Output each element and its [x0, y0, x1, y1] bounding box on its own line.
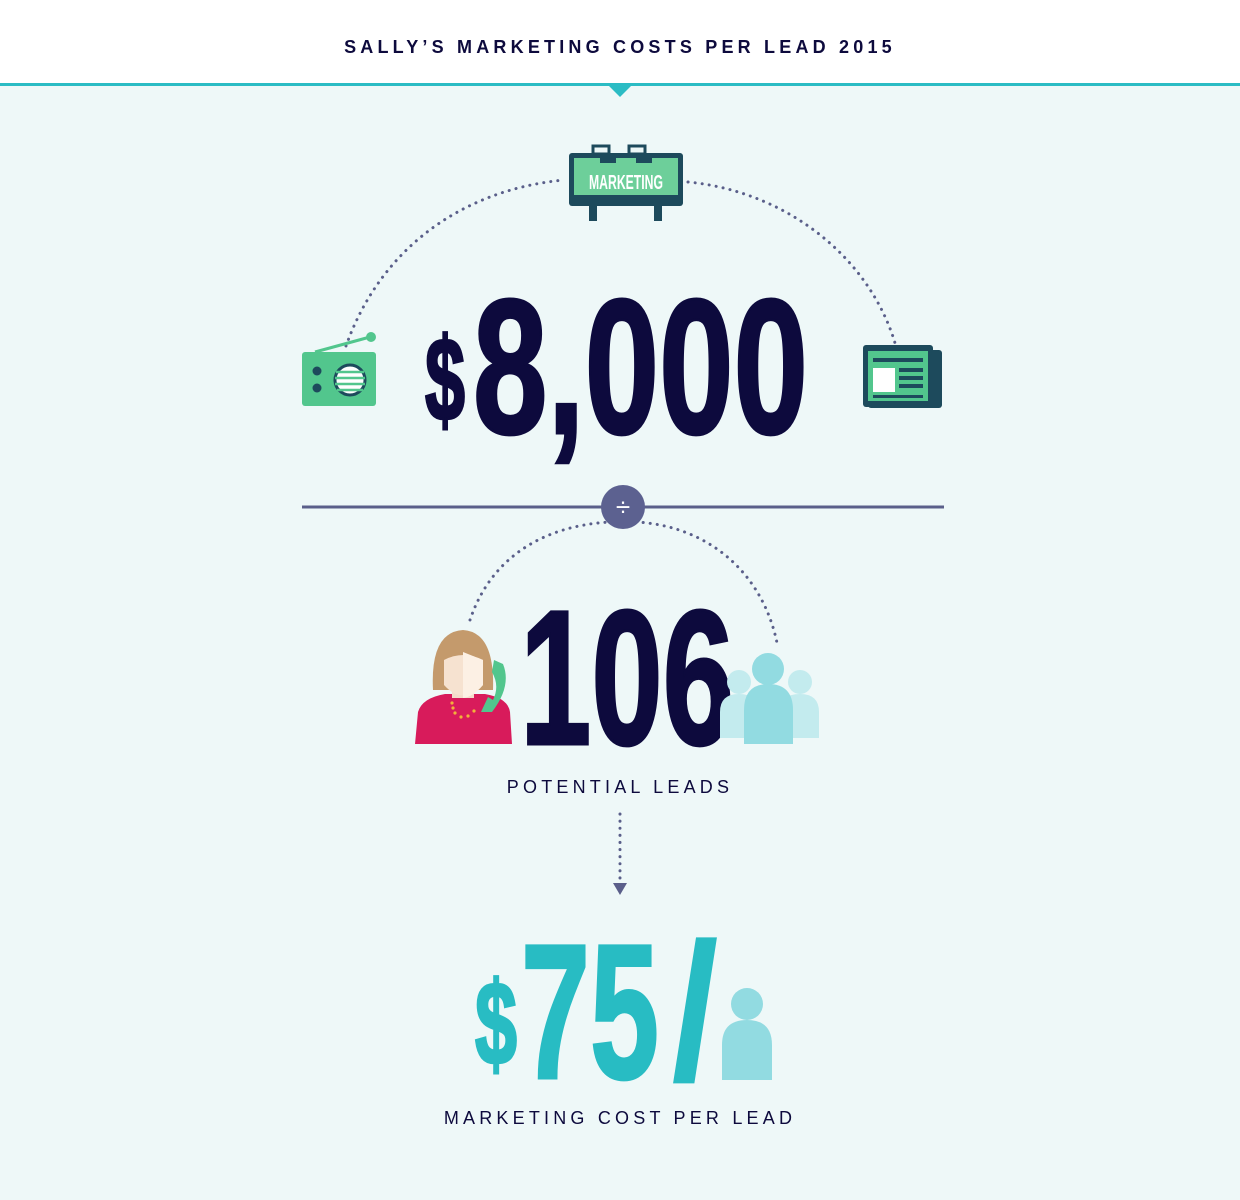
dotted arcs: [346, 180, 895, 878]
total cost number: $: [425, 314, 465, 446]
arrow head: [613, 883, 627, 895]
icon: billboard: [569, 146, 683, 221]
total cost number: 8,000: [473, 259, 808, 474]
icon: newspaper: [863, 345, 942, 408]
cost per lead number: 75: [521, 904, 659, 1119]
label: marketing cost per lead: MARKETING COST PER LEAD: [444, 1108, 796, 1128]
title: SALLY’S MARKETING COSTS PER LEAD 2015: [344, 37, 896, 57]
icon: single person: [722, 988, 772, 1080]
icon: group of people: [720, 653, 819, 744]
cost per lead number: /: [673, 904, 717, 1119]
cost per lead number: $: [475, 958, 517, 1090]
header bar: [0, 0, 1240, 86]
icon: woman on phone: [415, 630, 512, 744]
icon: billboard: MARKETING: [589, 172, 663, 194]
label: potential leads: POTENTIAL LEADS: [507, 777, 733, 797]
divider with divide symbol: ÷: [616, 492, 630, 522]
divider with divide symbol: [302, 485, 944, 529]
total cost number: [425, 259, 808, 474]
icon: radio: [302, 332, 376, 406]
leads number: 106: [520, 570, 734, 785]
header pointer: [607, 84, 633, 97]
